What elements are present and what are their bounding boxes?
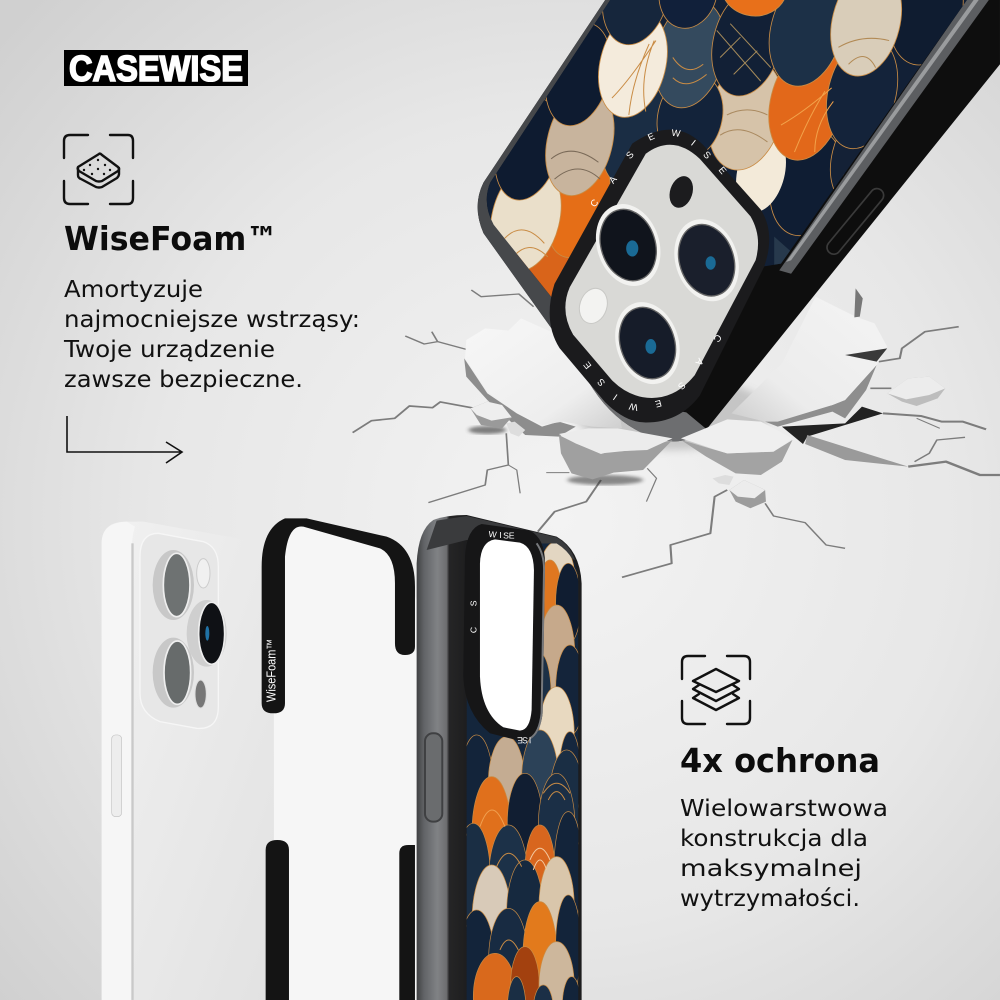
side button [824, 186, 886, 257]
ring lettering: C [710, 332, 723, 344]
ring lettering: S [624, 149, 637, 162]
icon: layers in viewfinder [682, 656, 750, 724]
text block: 4x ochrona description: maksymalnej [680, 856, 862, 882]
gold ribs [500, 24, 889, 260]
soft shadow under phone [576, 377, 769, 450]
front rubble slabs over phone tip [559, 419, 792, 485]
camera plateau [565, 145, 758, 398]
ring lettering: C [588, 197, 601, 210]
left slab [464, 318, 622, 437]
heading: 4x ochrona: 4x ochrona [680, 741, 880, 780]
bottom left slab [559, 428, 673, 485]
white panel [274, 523, 417, 1000]
ring lettering: W [488, 529, 498, 540]
exploded view: patterned case [417, 515, 584, 1000]
lenses [153, 550, 227, 708]
phone body [102, 522, 273, 1000]
ring lettering: E [582, 359, 594, 371]
text block: WiseFoam description: Twoje urządzenie [63, 337, 275, 363]
ring lettering: E [517, 735, 523, 745]
side button [425, 733, 442, 822]
ring lettering: C [469, 627, 479, 633]
ring lettering: W [671, 128, 681, 140]
text block: 4x ochrona description: Wielowarstwowa [680, 796, 888, 822]
text block: WiseFoam description: Amortyzuje [64, 277, 203, 303]
case frame [417, 515, 582, 1000]
small rocks [468, 377, 945, 508]
black foam strip: lower right [399, 845, 415, 1000]
scale pattern [486, 0, 967, 297]
camera plateau [140, 533, 218, 728]
ring lettering: I [611, 391, 620, 402]
crack lines [353, 290, 1000, 577]
ring lettering: E [654, 397, 663, 409]
camera cutout ring [463, 524, 545, 745]
text block: 4x ochrona description: wytrzymałości. [680, 886, 860, 912]
ring lettering: S [675, 379, 687, 392]
ring lettering: E [646, 131, 657, 144]
bottom right slab [681, 419, 792, 475]
text block: 4x ochrona description [680, 796, 888, 912]
black foam strip: lower left [266, 840, 289, 1000]
text block: 4x ochrona description: konstrukcja dla [680, 826, 868, 852]
ring lettering: I [529, 735, 531, 745]
ring lettering: S [522, 735, 528, 745]
ring lettering: W [628, 400, 639, 413]
ring lettering: S [469, 600, 479, 606]
scale pattern [466, 543, 578, 1000]
ring lettering [469, 529, 531, 745]
right slab [731, 288, 908, 467]
ring lettering: I [689, 138, 697, 149]
logo: CASEWISE: CASEWISE [69, 48, 243, 89]
camera ring [550, 128, 769, 423]
ring lettering [582, 128, 728, 413]
right highlight strip [779, 0, 989, 274]
case top [427, 516, 575, 560]
arrow [67, 416, 182, 463]
black foam strip: top [262, 518, 415, 713]
cracked wall behind phone [353, 288, 1000, 577]
icon: foam pad in viewfinder [64, 135, 133, 204]
heading: WiseFoam: WiseFoam™ [64, 219, 278, 258]
side strip [102, 522, 135, 1000]
translucent lower rim [585, 375, 707, 441]
ring lettering: A [692, 356, 705, 368]
left rim [478, 0, 610, 402]
ring lettering: E [509, 531, 515, 541]
lenses [575, 173, 749, 393]
ring lettering: I [499, 530, 502, 540]
side button [112, 735, 122, 817]
ring lettering: S [595, 376, 608, 388]
ring lettering: A [607, 174, 620, 186]
text block: WiseFoam description: najmocniejsze wstrząsy: [64, 307, 360, 333]
exploded view: white phone [102, 522, 273, 1000]
ring lettering: S [701, 149, 713, 162]
exploded view: WiseFoam layer [262, 518, 417, 1000]
text block: WiseFoam description: zawsze bezpieczne. [64, 367, 303, 393]
text block: WiseFoam description [63, 277, 360, 393]
case body [478, 0, 1000, 441]
WiseFoam label: WiseFoam™ [264, 639, 278, 702]
top phone in case [470, 0, 1000, 441]
ring lettering: S [503, 530, 509, 540]
ring lettering: E [716, 165, 728, 177]
